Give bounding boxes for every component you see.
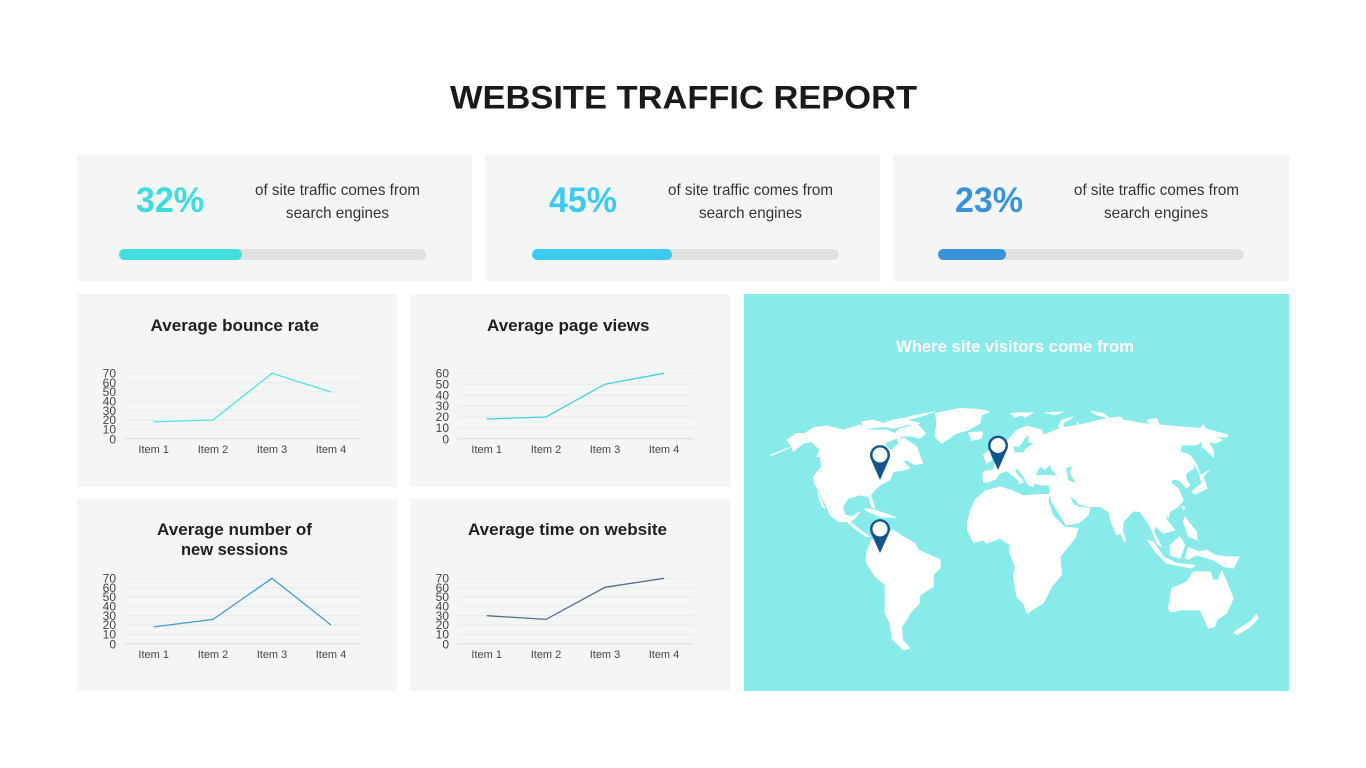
- line chart: new sessions: 20: [103, 618, 116, 632]
- line chart: new sessions: 40: [103, 600, 116, 614]
- Hudson Bay: [885, 438, 898, 450]
- line chart: new sessions: Item 2: [198, 649, 228, 661]
- line chart: new sessions: 50: [103, 590, 116, 604]
- line chart: page views: Item 4: [649, 444, 679, 456]
- chart title: new sessions: [181, 540, 288, 559]
- line chart: time on website: 0: [442, 638, 449, 652]
- line chart: bounce rate: 40: [103, 394, 116, 408]
- line chart: time on website: Item 2: [531, 649, 561, 661]
- stat description: search engines: [1104, 205, 1208, 222]
- line chart: new sessions: 60: [103, 581, 116, 595]
- line chart: bounce rate: 20: [103, 413, 116, 427]
- panel: stat 32%: [77, 155, 472, 282]
- line chart: page views: 20: [436, 410, 449, 424]
- line chart: time on website: Item 4: [649, 649, 679, 661]
- progress bar 32%: [119, 249, 426, 260]
- line chart: time on website: 70: [436, 572, 449, 586]
- stat description: search engines: [699, 205, 802, 222]
- line chart: time on website: 50: [436, 590, 449, 604]
- line chart: bounce rate: 30: [103, 404, 116, 418]
- line chart: time on website: 40: [436, 600, 449, 614]
- panel: average page views: [410, 294, 730, 487]
- line chart: time on website: Item 1: [471, 649, 502, 661]
- line chart: page views: 60: [436, 366, 449, 380]
- line chart: page views: 40: [436, 388, 449, 402]
- line chart: bounce rate: 70: [103, 366, 116, 380]
- chart title: Average page views: [487, 316, 650, 335]
- chart title: Average bounce rate: [150, 316, 319, 335]
- line chart: bounce rate: Item 3: [257, 444, 287, 456]
- stat description: [1074, 182, 1239, 222]
- stat description: search engines: [286, 205, 389, 222]
- progress bar 23%: [938, 249, 1244, 260]
- panel: average bounce rate: [77, 294, 397, 487]
- stat value 45%: 45%: [549, 181, 617, 220]
- line chart: page views: Item 2: [531, 444, 561, 456]
- panel: stat 23%: [893, 155, 1289, 282]
- map pin: South America: [870, 519, 890, 553]
- panel: where site visitors come from: [744, 294, 1289, 691]
- stat description: [255, 182, 420, 222]
- world map: [770, 408, 1258, 650]
- line chart: page views: 10: [436, 421, 449, 435]
- landmasses: [967, 411, 1258, 635]
- line chart: page views: 30: [436, 399, 449, 413]
- line chart: bounce rate: [103, 366, 361, 456]
- line chart: bounce rate: Item 4: [316, 444, 346, 456]
- line chart: time on website: 20: [436, 618, 449, 632]
- line chart: new sessions: Item 1: [138, 649, 169, 661]
- map pin: Europe: [988, 436, 1008, 470]
- line chart: bounce rate: Item 2: [198, 444, 228, 456]
- line chart: page views: 0: [442, 432, 449, 446]
- line chart: time on website: Item 3: [590, 649, 620, 661]
- line chart: time on website: 30: [436, 609, 449, 623]
- panel: stat 45%: [485, 155, 880, 282]
- chart title: Average number of: [157, 520, 312, 539]
- line chart: new sessions: Item 4: [316, 649, 346, 661]
- line chart: time on website: 10: [436, 628, 449, 642]
- line chart: new sessions: Item 3: [257, 649, 287, 661]
- panel: average number of new sessions: [77, 499, 397, 691]
- inland seas: [1013, 435, 1090, 508]
- line chart: bounce rate: 0: [109, 432, 116, 446]
- line chart: page views: [436, 366, 694, 456]
- progress bar 45%: [532, 249, 839, 260]
- line chart: bounce rate: 10: [103, 422, 116, 436]
- chart title: Average time on website: [468, 520, 667, 539]
- stat description: [668, 182, 833, 222]
- line chart: bounce rate: 50: [103, 385, 116, 399]
- line chart: new sessions: [103, 572, 361, 661]
- stat value 32%: 32%: [136, 181, 204, 220]
- chart title: [157, 520, 312, 559]
- line chart: page views: 50: [436, 377, 449, 391]
- line chart: time on website: 60: [436, 581, 449, 595]
- panel: average time on website: [410, 499, 730, 691]
- stat value 23%: 23%: [955, 181, 1023, 220]
- line chart: new sessions: 30: [103, 609, 116, 623]
- map pin: North America: [870, 445, 890, 480]
- title: WEBSITE TRAFFIC REPORT: [450, 80, 917, 116]
- stat description: of site traffic comes from: [1074, 182, 1239, 199]
- line chart: new sessions: 10: [103, 628, 116, 642]
- line chart: page views: Item 1: [471, 444, 502, 456]
- map title: Where site visitors come from: [896, 337, 1134, 356]
- line chart: new sessions: 70: [103, 572, 116, 586]
- line chart: new sessions: 0: [109, 638, 116, 652]
- line chart: page views: Item 3: [590, 444, 620, 456]
- stat description: of site traffic comes from: [255, 182, 420, 199]
- stat description: of site traffic comes from: [668, 182, 833, 199]
- line chart: bounce rate: 60: [103, 376, 116, 390]
- line chart: bounce rate: Item 1: [138, 444, 169, 456]
- line chart: time on website: [436, 572, 694, 661]
